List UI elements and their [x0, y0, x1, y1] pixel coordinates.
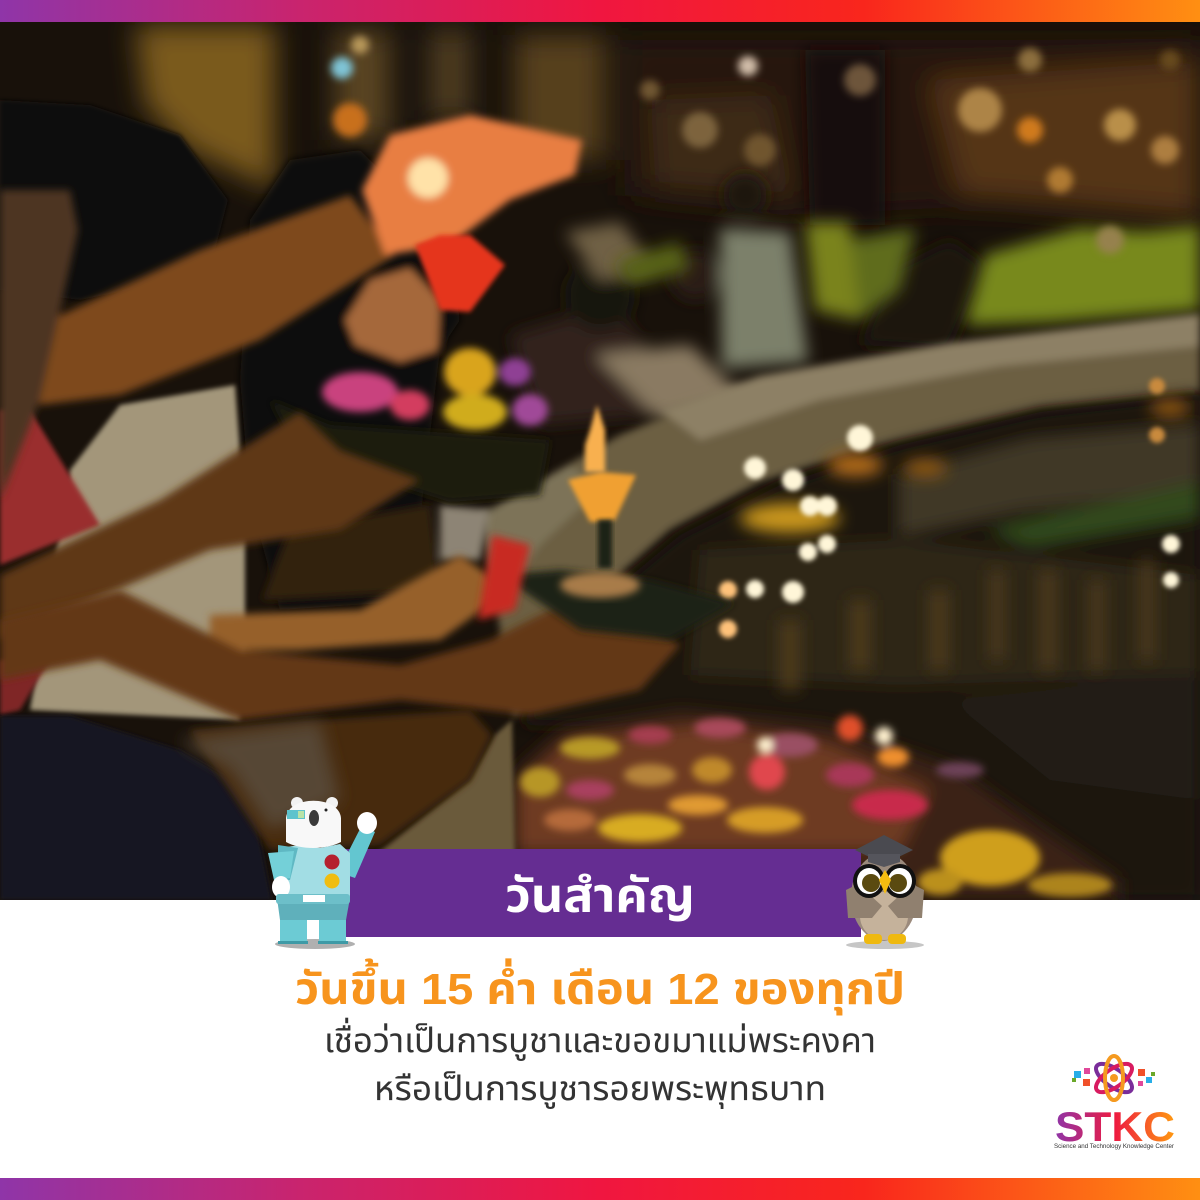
description text: หรือเป็นการบูชารอยพระพุทธบาท [374, 1070, 826, 1109]
bear torso [278, 844, 350, 897]
stone canal wall [480, 314, 1200, 720]
crowd bokeh lights [331, 36, 1180, 254]
person at left: hair, red shirt [0, 100, 228, 715]
raised arm and glowing hand [0, 115, 582, 500]
logo wordmark: STKC [1055, 1103, 1175, 1150]
STKC logo [1054, 1056, 1175, 1150]
water [624, 385, 1200, 798]
purple title banner [346, 849, 861, 937]
orange headline: วันขึ้น 15 ค่ำ เดือน 12 ของทุกปี [295, 958, 905, 1016]
lower arms [0, 555, 680, 720]
woman: hair and face [240, 150, 490, 610]
bear head [291, 797, 303, 809]
mascot: owl with graduation cap [846, 835, 924, 949]
blurred crowd [510, 47, 891, 428]
bear legs [280, 916, 307, 943]
crouching leg [190, 710, 492, 850]
bear raised arm [338, 825, 375, 878]
description text: เชื่อว่าเป็นการบูชาและขอขมาแม่พระคงคา [324, 1017, 876, 1061]
forearm holding upper krathong [0, 412, 420, 640]
stone step [378, 720, 517, 849]
bear belt [276, 894, 350, 904]
logo tagline: Science and Technology Knowledge Center [1054, 1144, 1174, 1150]
upper krathong [270, 348, 550, 502]
logo atom icon [1072, 1056, 1155, 1100]
grass [615, 222, 1200, 325]
lace blouse [30, 385, 245, 720]
red lotus candle [415, 235, 505, 312]
top gradient bar [0, 0, 1200, 23]
flower krathongs along the canal edge [515, 710, 1120, 900]
foreground knee [0, 716, 272, 900]
bear pants [277, 898, 350, 920]
description text [324, 1017, 876, 1109]
photo: Loy Krathong riverside at night [0, 22, 1200, 900]
mascot: polar bear robot [268, 797, 377, 949]
bottom gradient bar [0, 1178, 1200, 1200]
grey skirt [180, 722, 340, 830]
floating lights on the water [719, 378, 1190, 638]
lower krathong with lotus [478, 405, 735, 640]
title text: วันสำคัญ [505, 870, 695, 923]
